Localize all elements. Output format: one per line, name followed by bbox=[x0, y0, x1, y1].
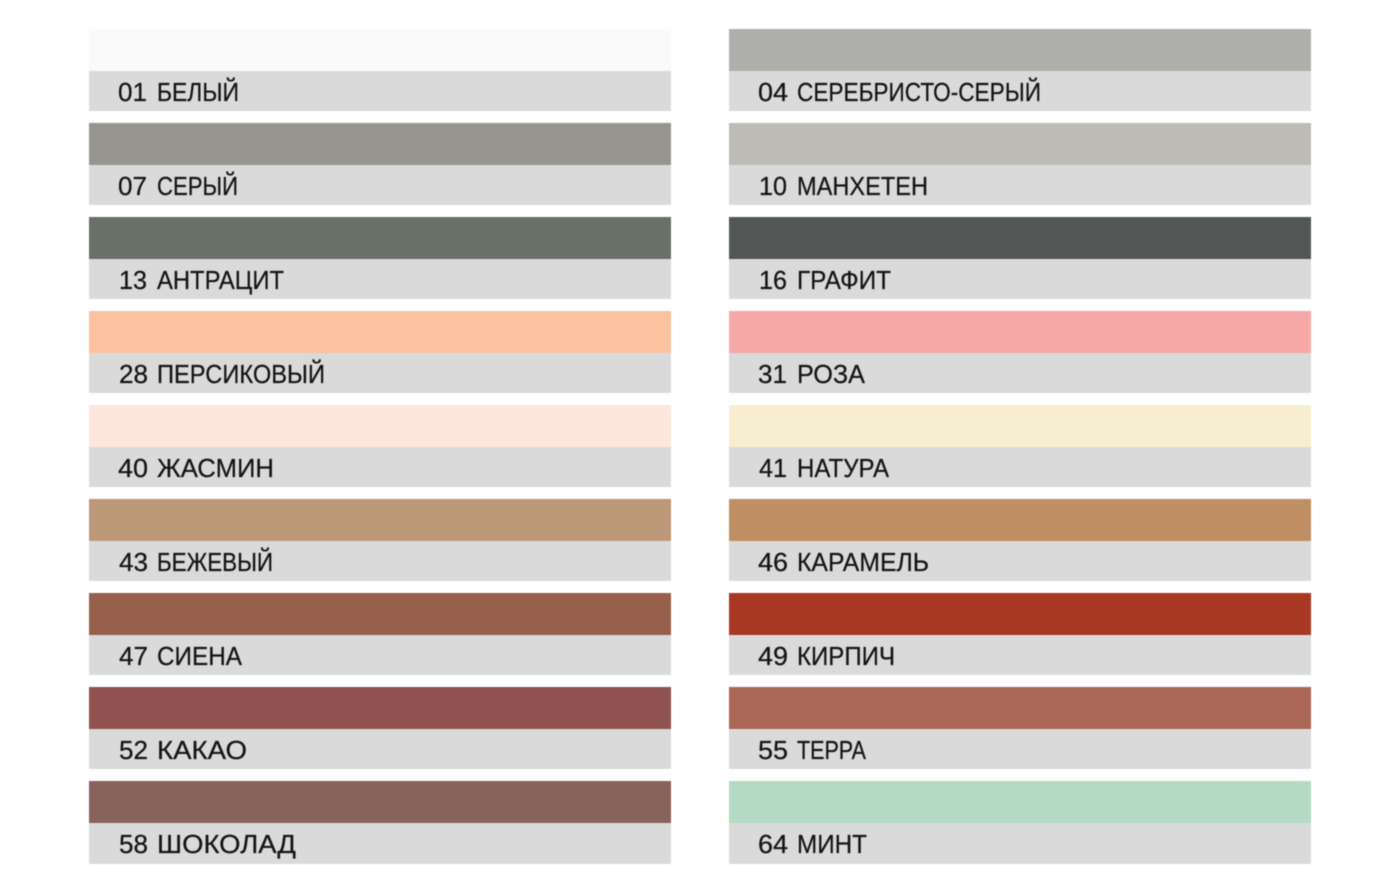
label text: 52 cocoa: 52 bbox=[119, 735, 148, 765]
label text: 49 brick bbox=[758, 641, 895, 671]
colour card: 28 peach bbox=[89, 311, 671, 393]
label text: 40 jasmine: 40 bbox=[118, 453, 148, 483]
label bar: 43 bbox=[89, 541, 671, 581]
label text: 04 silver grey: СЕРЕБРИСТО-СЕРЫЙ bbox=[797, 77, 1041, 107]
swatch: natura bbox=[729, 405, 1311, 447]
label bar: 47 bbox=[89, 635, 671, 675]
swatch: cocoa bbox=[89, 687, 671, 729]
label text: 43 beige: БЕЖЕВЫЙ bbox=[157, 547, 273, 577]
label text: 01 white: 01 bbox=[118, 77, 147, 107]
label bar: 55 bbox=[729, 729, 1311, 769]
label bar: 16 bbox=[729, 259, 1311, 299]
label bar: 46 bbox=[729, 541, 1311, 581]
label text: 40 jasmine: ЖАСМИН bbox=[157, 453, 274, 483]
label bar: 13 bbox=[89, 259, 671, 299]
label text: 04 silver grey: 04 bbox=[758, 77, 788, 107]
label bar: 40 bbox=[89, 447, 671, 487]
colour card: 47 siena bbox=[89, 593, 671, 675]
label text: 47 siena: 47 bbox=[119, 641, 148, 671]
label text: 01 white: БЕЛЫЙ bbox=[157, 77, 239, 107]
colour card: 52 cocoa bbox=[89, 687, 671, 769]
swatch: chocolate bbox=[89, 781, 671, 823]
label text: 47 siena: СИЕНА bbox=[157, 641, 243, 671]
swatch: grey bbox=[89, 123, 671, 165]
label text: 55 terra: 55 bbox=[758, 735, 788, 765]
swatch: jasmine bbox=[89, 405, 671, 447]
swatch: anthracite bbox=[89, 217, 671, 259]
label text: 64 mint bbox=[758, 829, 867, 859]
label text: 13 anthracite: 13 bbox=[119, 265, 147, 295]
label text: 43 beige: 43 bbox=[119, 547, 148, 577]
label bar: 04 bbox=[729, 71, 1311, 111]
colour card: 55 terra bbox=[729, 687, 1311, 769]
label text: 41 natura bbox=[759, 453, 890, 483]
colour card: 07 grey bbox=[89, 123, 671, 205]
label bar: 01 bbox=[89, 71, 671, 111]
swatch: siena bbox=[89, 593, 671, 635]
label text: 47 siena bbox=[119, 641, 243, 671]
label text: 46 caramel: КАРАМЕЛЬ bbox=[797, 547, 929, 577]
swatch: brick bbox=[729, 593, 1311, 635]
label bar: 41 bbox=[729, 447, 1311, 487]
swatch: caramel bbox=[729, 499, 1311, 541]
label text: 43 beige bbox=[119, 547, 273, 577]
colour card: 01 white bbox=[89, 29, 671, 111]
label text: 52 cocoa bbox=[119, 735, 247, 765]
label text: 52 cocoa: КАКАО bbox=[157, 735, 247, 765]
label text: 31 rose bbox=[758, 359, 866, 389]
label text: 07 grey: СЕРЫЙ bbox=[157, 171, 238, 201]
label text: 49 brick: 49 bbox=[758, 641, 788, 671]
colour card: 16 graphite bbox=[729, 217, 1311, 299]
label bar: 64 bbox=[729, 823, 1311, 864]
swatch: rose bbox=[729, 311, 1311, 353]
label text: 10 manhattan: 10 bbox=[759, 171, 787, 201]
colour card: 31 rose bbox=[729, 311, 1311, 393]
label text: 58 chocolate: 58 bbox=[119, 829, 148, 859]
swatch: silver grey bbox=[729, 29, 1311, 71]
colour card: 04 silver grey bbox=[729, 29, 1311, 111]
colour card: 10 manhattan bbox=[729, 123, 1311, 205]
swatch: peach bbox=[89, 311, 671, 353]
label text: 46 caramel: 46 bbox=[758, 547, 788, 577]
swatch: white bbox=[89, 29, 671, 71]
label text: 16 graphite: ГРАФИТ bbox=[797, 265, 891, 295]
swatch: manhattan bbox=[729, 123, 1311, 165]
label text: 31 rose: 31 bbox=[758, 359, 787, 389]
colour card: 46 caramel bbox=[729, 499, 1311, 581]
label bar: 07 bbox=[89, 165, 671, 205]
label text: 07 grey: 07 bbox=[118, 171, 147, 201]
swatch: graphite bbox=[729, 217, 1311, 259]
label text: 16 graphite bbox=[759, 265, 891, 295]
label text: 31 rose: РОЗА bbox=[797, 359, 866, 389]
label text: 55 terra bbox=[758, 735, 867, 765]
colour card: 43 beige bbox=[89, 499, 671, 581]
colour card: 41 natura bbox=[729, 405, 1311, 487]
label text: 55 terra: ТЕРРА bbox=[797, 735, 867, 765]
label text: 10 manhattan: МАНХЕТЕН bbox=[797, 171, 928, 201]
label bar: 49 bbox=[729, 635, 1311, 675]
swatch: mint bbox=[729, 781, 1311, 823]
label text: 64 mint: 64 bbox=[758, 829, 788, 859]
label text: 28 peach: ПЕРСИКОВЫЙ bbox=[157, 359, 325, 389]
label text: 01 white bbox=[118, 77, 239, 107]
label text: 58 chocolate: ШОКОЛАД bbox=[157, 829, 296, 859]
label text: 28 peach: 28 bbox=[119, 359, 148, 389]
label text: 41 natura: 41 bbox=[759, 453, 787, 483]
colour card: 58 chocolate bbox=[89, 781, 671, 864]
label text: 41 natura: НАТУРА bbox=[797, 453, 890, 483]
label bar: 28 bbox=[89, 353, 671, 393]
label bar: 10 bbox=[729, 165, 1311, 205]
label bar: 52 bbox=[89, 729, 671, 769]
label text: 64 mint: МИНТ bbox=[797, 829, 867, 859]
colour card: 40 jasmine bbox=[89, 405, 671, 487]
label text: 16 graphite: 16 bbox=[759, 265, 787, 295]
colour card: 13 anthracite bbox=[89, 217, 671, 299]
colour card: 64 mint bbox=[729, 781, 1311, 864]
swatch: beige bbox=[89, 499, 671, 541]
label text: 49 brick: КИРПИЧ bbox=[797, 641, 895, 671]
label bar: 31 bbox=[729, 353, 1311, 393]
label bar: 58 bbox=[89, 823, 671, 864]
swatch: terra bbox=[729, 687, 1311, 729]
label text: 13 anthracite: АНТРАЦИТ bbox=[157, 265, 284, 295]
colour card: 49 brick bbox=[729, 593, 1311, 675]
label text: 07 grey bbox=[118, 171, 238, 201]
